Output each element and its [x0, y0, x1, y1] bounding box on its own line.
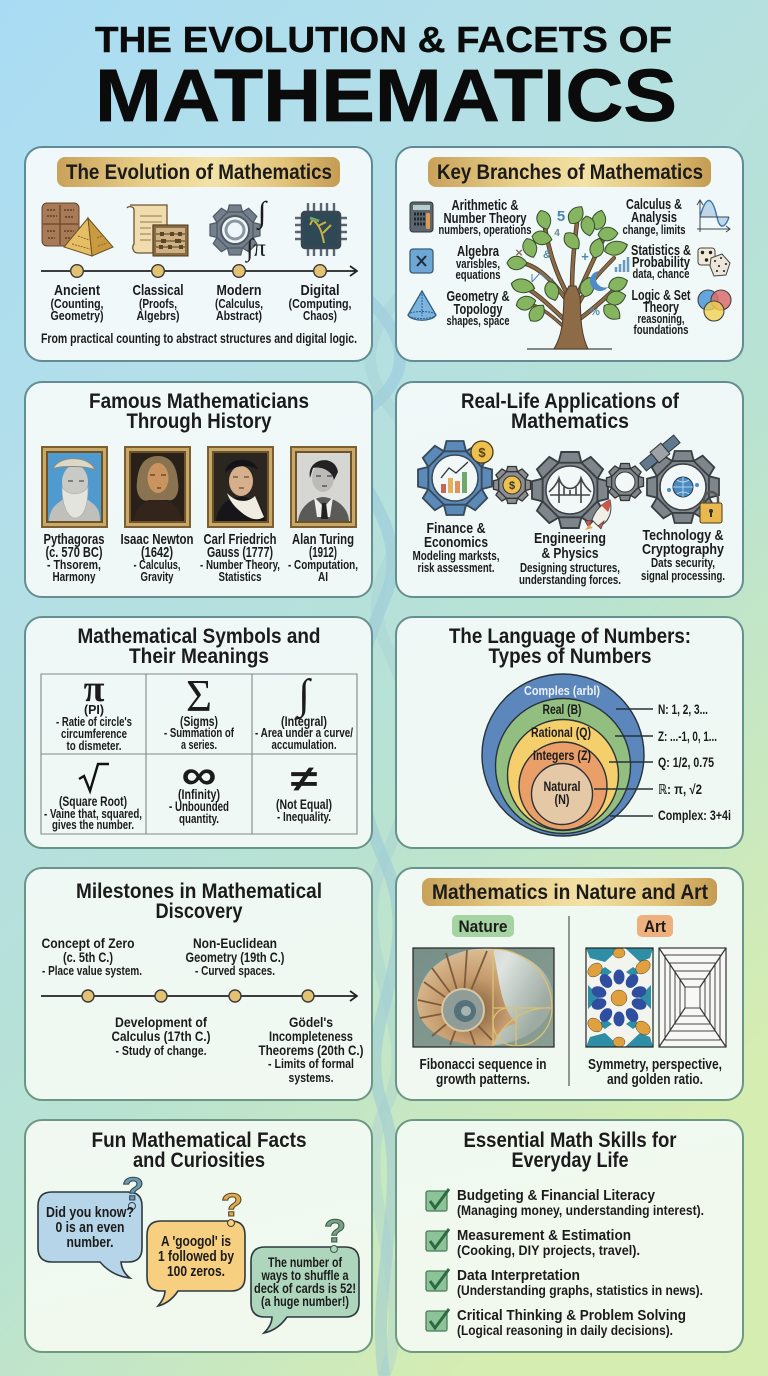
caption: art: and golden ratio. [607, 1071, 703, 1088]
label: geometry and topology: Topology [454, 301, 503, 318]
milestone: godel: Gödel's [289, 1015, 333, 1030]
speech bubble: card shuffle: ? [324, 1213, 346, 1249]
cell: pi: π [84, 668, 105, 710]
illustration: tree of mathematics: % [590, 306, 600, 318]
label: classical [132, 282, 184, 323]
cell: pi: - Ratie of circle's [56, 715, 132, 729]
cell: pi: to dismeter. [66, 739, 122, 753]
labels: number examples: N: 1, 2, 3... [658, 702, 708, 717]
panel: key branches of mathematics [396, 147, 743, 361]
caption: pythagoras: - Thsorem, [47, 558, 101, 572]
caption: pythagoras [44, 531, 104, 584]
label: classical: Classical [132, 282, 184, 299]
label: modern: (Calculus, [215, 297, 263, 311]
heading: nature and art: Mathematics in Nature and Art [432, 881, 708, 904]
speech bubble: zero [38, 1171, 144, 1278]
portrait: carl friedrich gauss [207, 446, 274, 528]
diagram: nested number sets: Real (B) [542, 702, 582, 717]
icon: satellite [639, 433, 681, 473]
caption: engineering: understanding forces. [519, 573, 621, 587]
milestone: non-euclidean geometry [186, 936, 284, 978]
timeline arrow [41, 265, 357, 277]
panel: milestones [25, 868, 372, 1100]
cell: square root: - Vaine that, squared, [44, 807, 142, 821]
cell: sigma: a series. [181, 738, 217, 752]
label: classical: (Proofs, [139, 297, 177, 311]
heading: essential skills: Everyday Life [512, 1149, 628, 1172]
label: algebra: varisbles, [456, 257, 500, 271]
heading: famous mathematicians: Famous Mathematicians [89, 390, 309, 413]
heading: key branches [428, 157, 711, 187]
cell: pi: (PI) [84, 703, 104, 717]
milestone: non-euclidean geometry: Geometry (19th C.) [186, 950, 284, 965]
cell: infinity [169, 751, 229, 826]
label: calculus and analysis [622, 196, 730, 237]
diagram: nested number sets [482, 674, 653, 836]
cell: square root [44, 764, 142, 832]
label: algebra: Algebra [457, 243, 499, 260]
skill: measurement: (Cooking, DIY projects, travel). [457, 1243, 640, 1258]
icon: rocket [585, 500, 611, 530]
cell: not equal: (Not Equal) [276, 797, 332, 812]
heading: milestones [76, 880, 322, 923]
caption: engineering: & Physics [542, 545, 598, 562]
label: geometry and topology: Geometry & [446, 288, 510, 305]
diagram: nested number sets: Comples (arbl) [524, 683, 600, 698]
caption: isaac newton: Gravity [140, 570, 174, 584]
caption: art [588, 1056, 722, 1088]
heading: essential skills [464, 1129, 676, 1172]
label: modern: Modern [216, 282, 262, 299]
heading: key branches: Key Branches of Mathematics [437, 161, 703, 184]
icon: circuit chip [295, 203, 347, 256]
label: arithmetic and number theory: numbers, operations [438, 223, 532, 237]
panel: mathematical symbols [25, 617, 372, 848]
label: logic and set theory: foundations [634, 323, 689, 337]
heading: famous mathematicians: Through History [126, 410, 272, 433]
speech bubble: googol: ? [221, 1187, 243, 1223]
label: statistics and probability: Statistics & [631, 242, 691, 259]
icon: gear with integral and pi [210, 196, 268, 263]
heading: the evolution of mathematics [57, 157, 340, 187]
cell: infinity: - Unbounded [169, 799, 229, 814]
icon: scroll and abacus [127, 205, 188, 256]
skill: critical thinking: Critical Thinking & Problem Solving [457, 1307, 686, 1324]
milestone: zero: - Place value system. [42, 964, 142, 978]
milestone: zero: (c. 5th C.) [63, 950, 113, 965]
label: logic and set theory: Logic & Set [632, 287, 690, 304]
label: calculus and analysis: change, limits [622, 223, 686, 237]
label: modern: Abstract) [216, 309, 262, 323]
cell: not equal: - Inequality. [277, 810, 331, 824]
heading: milestones: Milestones in Mathematical [76, 880, 322, 903]
heading: symbols: Mathematical Symbols and [78, 625, 320, 648]
skill: data interpretation [426, 1267, 703, 1298]
cell: integral: accumulation. [272, 738, 336, 752]
heading: symbols: Their Meanings [129, 645, 269, 668]
milestone: non-euclidean geometry: Non-Euclidean [193, 936, 277, 951]
labels: number examples: ℝ: π, √2 [658, 782, 702, 797]
milestone: godel: - Limits of formal [268, 1057, 354, 1071]
milestone: zero [42, 936, 142, 978]
skill: measurement [426, 1227, 640, 1258]
label: statistics and probability [631, 242, 730, 281]
diagram: nested number sets: Natural [544, 779, 580, 794]
heading: symbols [78, 625, 320, 668]
heading: milestones: Discovery [156, 900, 243, 923]
label: arithmetic and number theory: Arithmetic & [452, 197, 519, 214]
cell: sigma: (Sigms) [180, 714, 218, 729]
label: geometry and topology: shapes, space [446, 314, 510, 328]
cell: pi [56, 668, 132, 753]
label: statistics and probability: Probability [632, 254, 690, 271]
speech bubble: zero: ? [122, 1171, 144, 1207]
heading: famous mathematicians [89, 390, 309, 433]
heading: fun facts: Fun Mathematical Facts [92, 1129, 306, 1152]
icon: small ring gear [606, 464, 644, 500]
decorative ribbon [330, 260, 440, 1376]
caption: isaac newton: - Calculus, [134, 558, 180, 572]
label: classical: Algebrs) [136, 309, 180, 323]
tag: nature: Nature [458, 917, 508, 936]
speech bubble: card shuffle: deck of cards is 52! [254, 1281, 356, 1296]
label: ancient: Ancient [54, 282, 100, 299]
skill: budgeting [426, 1187, 704, 1218]
heading: types of numbers [449, 625, 691, 668]
label: calculus and analysis: Analysis [631, 209, 677, 226]
caption: finance: Modeling marksts, [412, 549, 500, 563]
panel: nature and art [396, 868, 743, 1100]
diagram: nested number sets: Integers (Z) [533, 748, 591, 763]
caption: carl friedrich gauss: Carl Friedrich [204, 531, 276, 548]
caption: technology: Technology & [642, 527, 724, 544]
label: modern [215, 282, 263, 323]
caption: alan turing: AI [318, 570, 328, 584]
cell: not equal [276, 758, 332, 824]
icon: padlock [700, 492, 722, 523]
caption: nature: growth patterns. [436, 1071, 530, 1088]
heading: essential skills: Essential Math Skills for [464, 1129, 676, 1152]
milestone: zero: Concept of Zero [42, 936, 134, 951]
caption: nature: Fibonacci sequence in [420, 1056, 546, 1073]
caption: isaac newton: Isaac Newton [120, 531, 194, 548]
caption: carl friedrich gauss: - Number Theory, [200, 558, 280, 572]
milestone: calculus: Calculus (17th C.) [112, 1029, 210, 1044]
panel: essential math skills [396, 1120, 743, 1352]
labels: number examples: Complex: 3+4i [658, 808, 731, 823]
diagram: nested number sets: (N) [554, 792, 570, 807]
skill: budgeting: (Managing money, understanding interest). [457, 1203, 704, 1218]
cell: infinity: (Infinity) [178, 787, 220, 802]
label: digital: Digital [300, 282, 340, 299]
cell: square root: gives the number. [52, 818, 134, 832]
caption: pythagoras: (c. 570 BC) [46, 544, 103, 561]
speech bubble: card shuffle [251, 1213, 359, 1333]
caption: alan turing: - Computation, [288, 558, 358, 572]
cell: sigma [164, 670, 235, 752]
caption: isaac newton [120, 531, 194, 584]
cell: pi: circumference [61, 727, 127, 741]
heading: types of numbers: Types of Numbers [488, 645, 652, 668]
label: statistics and probability: data, chance [632, 267, 690, 281]
heading: fun facts [92, 1129, 306, 1172]
label: ancient [50, 282, 104, 323]
speech bubble: card shuffle: ways to shuffle a [261, 1268, 349, 1283]
caption: carl friedrich gauss: Gauss (1777) [207, 544, 273, 561]
speech bubble: googol: 1 followed by [158, 1248, 235, 1265]
title: THE EVOLUTION & FACETS OF [95, 19, 672, 60]
milestone: godel: systems. [288, 1071, 334, 1085]
caption: isaac newton: (1642) [141, 544, 173, 561]
caption: technology [641, 527, 725, 583]
cell: integral [255, 672, 353, 752]
icon: technology gear with globe [647, 451, 719, 523]
icon: finance gear: $ [478, 445, 486, 460]
divider [568, 916, 570, 1086]
caption: engineering: Designing structures, [520, 561, 620, 575]
caption: pythagoras: Pythagoras [44, 531, 104, 548]
label: arithmetic and number theory: Number Theory [444, 210, 527, 227]
caption: carl friedrich gauss: Statistics [218, 570, 262, 584]
label: logic and set theory: reasoning, [638, 312, 684, 326]
label: ancient: (Counting, [50, 297, 104, 311]
caption: nature [420, 1056, 546, 1088]
label: digital: (Computing, [288, 297, 352, 311]
label: logic and set theory: Theory [643, 299, 679, 316]
panel: the evolution of mathematics [25, 147, 372, 361]
cell: integral: ∫ [295, 672, 312, 720]
icon: small dollar gear: $ [509, 480, 515, 492]
illustration: tree of mathematics: × [515, 245, 523, 260]
panel: real-life applications [396, 382, 743, 597]
label: ancient: Geometry) [50, 309, 104, 323]
milestone: calculus [112, 1015, 210, 1058]
caption: pythagoras: Harmony [52, 570, 96, 584]
cell: not equal: ≠ [290, 758, 318, 799]
speech bubble: zero: Did you know? [46, 1204, 134, 1221]
milestone: godel: Incompleteness [269, 1029, 353, 1044]
timeline arrow [41, 990, 357, 1002]
caption: art: Symmetry, perspective, [588, 1056, 722, 1073]
heading: fun facts: and Curiosities [133, 1149, 265, 1172]
speech bubble: googol: 100 zeros. [167, 1263, 225, 1280]
caption: finance [412, 520, 500, 575]
skill: data interpretation: Data Interpretation [457, 1267, 580, 1284]
speech bubble: googol [147, 1187, 245, 1306]
cell: integral: (Integral) [281, 714, 327, 729]
icon: gear with integral and pi: ∫ [256, 196, 268, 231]
speech bubble: zero: number. [66, 1234, 114, 1251]
icon: finance gear [418, 441, 493, 515]
milestone: calculus: - Study of change. [116, 1044, 206, 1058]
diagram: nested number sets: Rational (Q) [531, 725, 591, 740]
heading: real-life applications [461, 390, 680, 433]
illustration: tree of mathematics [507, 203, 630, 349]
illustration: tree of mathematics: 4 [554, 228, 560, 239]
label: digital: Chaos) [303, 309, 337, 323]
icon: engineering gear with bridge [532, 452, 608, 528]
caption: alan turing [288, 531, 358, 584]
heading: real-life applications: Real-Life Applications of [461, 390, 680, 413]
labels: number examples: Q: 1/2, 0.75 [658, 755, 714, 770]
milestone: non-euclidean geometry: - Curved spaces. [195, 964, 275, 978]
label: algebra: equations [456, 268, 501, 282]
labels: number examples [658, 702, 731, 823]
caption: alan turing: Alan Turing [292, 531, 354, 548]
label: geometry and topology [408, 288, 510, 328]
label: logic and set theory [632, 287, 731, 337]
cell: infinity: quantity. [179, 812, 219, 826]
labels: number examples: Z: ...-1, 0, 1... [658, 729, 717, 744]
cell: integral: - Area under a curve/ [255, 726, 353, 740]
skill: data interpretation: (Understanding graphs, statistics in news). [457, 1283, 703, 1298]
caption: technology: signal processing. [641, 569, 725, 583]
caption: carl friedrich gauss [200, 531, 280, 584]
heading: real-life applications: Mathematics [511, 410, 629, 433]
skill: critical thinking [426, 1307, 686, 1338]
panel: famous mathematicians [25, 382, 372, 597]
image: nautilus shell with golden spiral [413, 948, 554, 1047]
heading: types of numbers: The Language of Numbers: [449, 625, 691, 648]
cell: sigma: - Summation of [164, 726, 235, 740]
title [95, 19, 677, 137]
caption: From practical counting to abstract structures and digital logic. [41, 331, 357, 346]
label: calculus and analysis: Calculus & [626, 196, 682, 213]
label: arithmetic and number theory [410, 197, 532, 237]
cell: sigma: Σ [186, 670, 212, 721]
icon: clay tablet and pyramid [42, 203, 113, 256]
title: MATHEMATICS [95, 54, 677, 137]
label: algebra [410, 243, 501, 282]
panel: fun facts [25, 1120, 372, 1352]
illustration: tree of mathematics: + [581, 249, 589, 264]
caption: technology: Dats security, [651, 556, 715, 570]
milestone: godel [258, 1015, 364, 1085]
icon: gear with integral and pi: ∫π [244, 235, 266, 263]
image: perspective drawing [659, 948, 726, 1047]
image: islamic geometric pattern [585, 948, 653, 1047]
milestone: godel: Theorems (20th C.) [258, 1043, 364, 1058]
portrait: isaac newton [124, 446, 191, 528]
skill: critical thinking: (Logical reasoning in daily decisions). [457, 1323, 673, 1338]
label: digital [288, 282, 352, 323]
panel: types of numbers [396, 617, 743, 848]
icon: small dollar gear [494, 466, 530, 504]
portrait: alan turing [290, 446, 357, 528]
caption: finance: Economics [424, 534, 488, 551]
caption: technology: Cryptography [642, 541, 725, 558]
caption: finance: Finance & [426, 520, 486, 537]
speech bubble: card shuffle: (a huge number!) [261, 1294, 349, 1309]
symbol table grid [41, 674, 357, 834]
illustration: tree of mathematics: & [543, 249, 551, 261]
cell: infinity: ∞ [182, 751, 216, 798]
caption: finance: risk assessment. [418, 561, 494, 575]
heading: the evolution of mathematics: The Evolution of Mathematics [66, 161, 332, 184]
caption: alan turing: (1912) [309, 544, 337, 561]
caption: engineering: Engineering [534, 530, 606, 547]
skill: budgeting: Budgeting & Financial Literacy [457, 1187, 656, 1204]
speech bubble: googol: A 'googol' is [161, 1233, 231, 1250]
illustration: tree of mathematics: 5 [557, 208, 565, 225]
speech bubble: card shuffle: The number of [268, 1255, 342, 1270]
portrait: pythagoras [41, 446, 108, 528]
milestone: calculus: Development of [115, 1015, 207, 1030]
tag: art [637, 915, 673, 937]
cell: square root: (Square Root) [59, 794, 127, 809]
tag: art: Art [644, 917, 666, 936]
skill: measurement: Measurement & Estimation [457, 1227, 631, 1244]
caption: engineering [519, 530, 621, 587]
speech bubble: zero: 0 is an even [56, 1219, 124, 1236]
